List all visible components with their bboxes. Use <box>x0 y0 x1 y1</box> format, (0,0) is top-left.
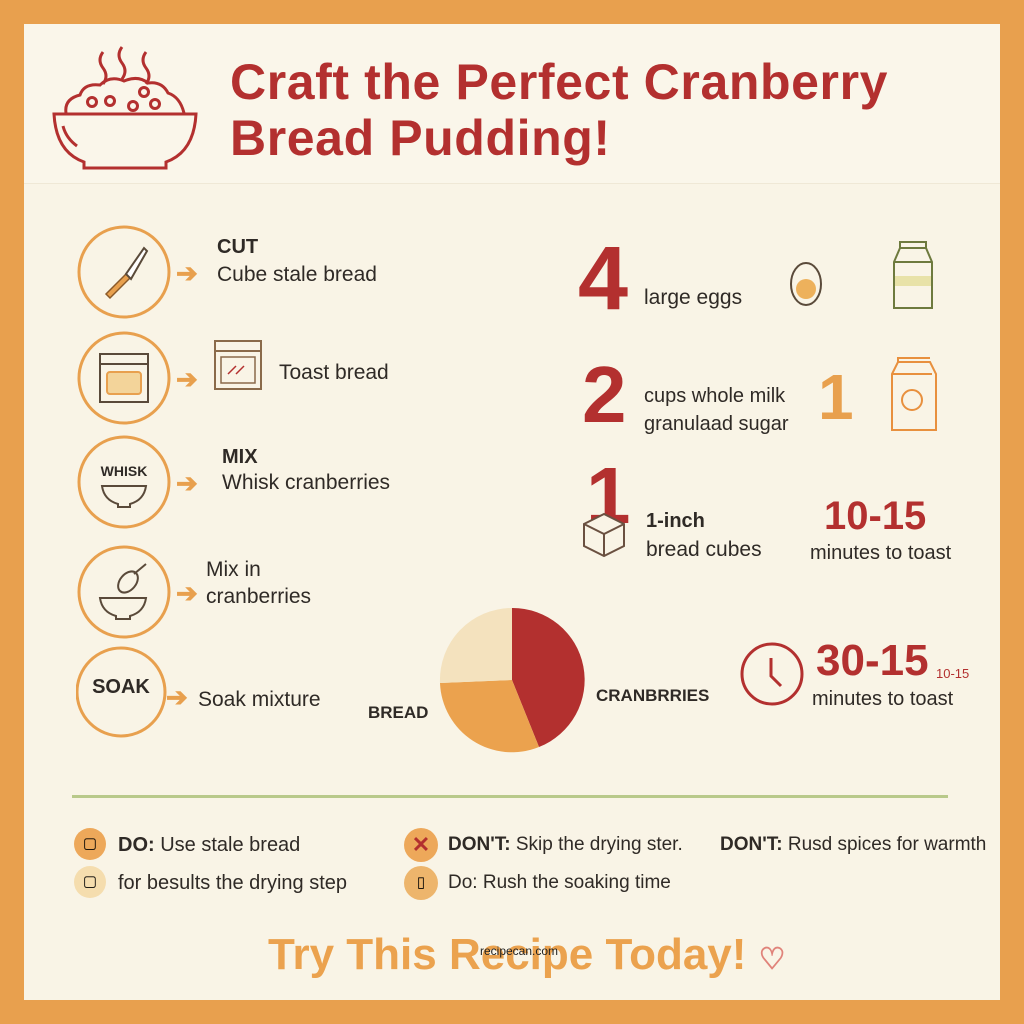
step 4: mix in: cranberries <box>206 585 311 608</box>
stat: bread cubes: 1 <box>586 451 630 540</box>
step 3: mix: Whisk cranberries <box>222 471 390 494</box>
icon: sugar box <box>891 357 937 431</box>
stat: toast time: 10-15 <box>824 494 926 538</box>
step 1: cut <box>78 226 377 318</box>
tip: rush soaking: Do: Rush the soaking time <box>448 872 671 893</box>
tip: spices: DON'T: Rusd spices for warmth <box>720 834 986 855</box>
step 5: soak <box>76 646 321 738</box>
step 3: mix <box>78 436 390 528</box>
stat: toast time: minutes to toast <box>810 542 951 564</box>
icon: milk carton <box>893 241 933 309</box>
stat: eggs <box>578 229 933 329</box>
icon: pudding bowl <box>52 46 198 170</box>
step 2: toast: Toast bread <box>279 361 389 384</box>
stat: milk <box>582 350 937 439</box>
step 2: toast: ➔ <box>176 364 198 394</box>
step 5: soak: ➔ <box>166 682 188 712</box>
tip: do use stale bread: DO: Use stale bread <box>118 834 300 856</box>
stat: soak time with clock: 30-15 <box>816 636 929 685</box>
tip: for best results <box>74 866 347 898</box>
footer call to action: Try This Recipe Today! ♡ <box>268 930 786 979</box>
stat: bread cubes <box>583 451 762 561</box>
pie chart: BREAD <box>368 703 428 722</box>
stat: bread cubes: 1-inch <box>646 510 705 532</box>
stat: toast time <box>810 494 952 564</box>
tip: for best results: for besults the drying step <box>118 872 347 894</box>
stat: milk: 1 <box>818 361 854 433</box>
stat: soak time with clock: minutes to toast <box>812 688 953 710</box>
step 4: mix in: ➔ <box>176 578 198 608</box>
step 5: soak: Soak mixture <box>198 688 321 711</box>
tip: rush soaking: ▯ <box>417 874 425 891</box>
tip: do use stale bread <box>74 828 300 860</box>
stat: milk: 2 <box>582 350 626 439</box>
tip: don't skip <box>404 828 683 862</box>
tip: don't skip: ✕ <box>412 832 430 857</box>
stat: eggs: large eggs <box>644 286 742 309</box>
icon: egg <box>790 262 822 306</box>
title: Bread Pudding! <box>230 110 611 166</box>
stat: soak time with clock: 10-15 <box>936 666 969 681</box>
step 1: cut: Cube stale bread <box>217 263 377 286</box>
title: Craft the Perfect Cranberry <box>230 54 888 110</box>
pie chart <box>368 608 709 752</box>
tip: for best results: ▢ <box>83 873 97 890</box>
stat: soak time with clock <box>740 636 969 710</box>
text: recipecan.com <box>480 944 558 958</box>
tip: rush soaking <box>404 866 671 900</box>
step 3: mix: MIX <box>222 446 258 468</box>
pie chart: CRANBRRIES <box>596 686 709 705</box>
tips: do and don't <box>74 828 986 900</box>
step 1: cut: ➔ <box>176 258 198 288</box>
title <box>230 54 888 166</box>
step 1: cut: CUT <box>217 236 258 258</box>
stat: milk: cups whole milk <box>644 385 785 407</box>
tip: don't skip: DON'T: Skip the drying ster. <box>448 834 683 855</box>
tip: do use stale bread: ▢ <box>83 835 97 852</box>
stat: milk: granulaad sugar <box>644 413 789 435</box>
step 4: mix in: Mix in <box>206 558 261 581</box>
step 4: mix in <box>78 546 311 638</box>
stat: bread cubes: bread cubes <box>646 538 762 561</box>
step 5: soak: SOAK <box>92 676 150 698</box>
step 3: mix: WHISK <box>101 463 147 479</box>
step 3: mix: ➔ <box>176 468 198 498</box>
panel: steps <box>76 226 390 738</box>
stat: eggs: 4 <box>578 229 628 329</box>
step 2: toast <box>78 332 389 424</box>
